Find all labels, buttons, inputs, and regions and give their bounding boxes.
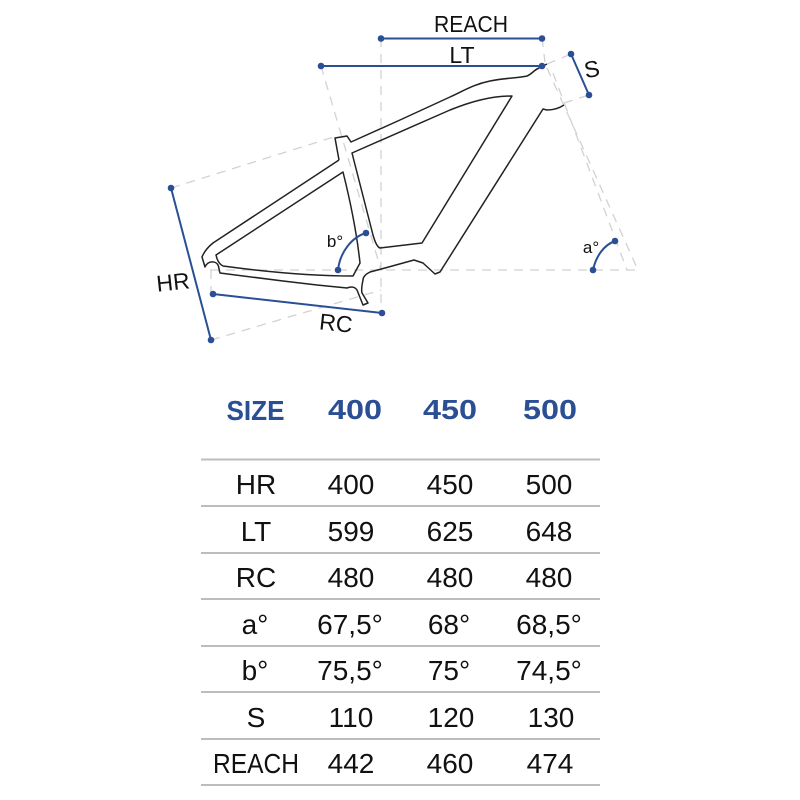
dimension S (568, 51, 602, 98)
frame top contour (335, 64, 547, 160)
row HR: 400 (328, 469, 374, 500)
row HR: 450 (427, 469, 473, 500)
frame lower contour (202, 105, 564, 305)
row b: 75,5° (317, 655, 383, 686)
row HR (236, 469, 572, 500)
row RC: 480 (328, 562, 374, 593)
main triangle opening (352, 96, 512, 248)
row S: 130 (528, 702, 574, 733)
table header: 500 (523, 394, 577, 425)
row b: b° (242, 655, 268, 686)
table header: 450 (423, 394, 477, 425)
dimension RC: RC (318, 308, 354, 338)
dimension REACH (378, 11, 545, 42)
row LT: 599 (328, 516, 374, 547)
row RC: RC (236, 562, 276, 593)
row a (242, 609, 582, 640)
row b: 74,5° (516, 655, 582, 686)
dimension LT (318, 42, 545, 69)
row a: 67,5° (317, 609, 383, 640)
row S: 120 (428, 702, 474, 733)
angle b: b° (327, 232, 343, 251)
row REACH: 442 (328, 748, 374, 779)
row RC: 480 (526, 562, 572, 593)
row REACH (213, 748, 573, 779)
row REACH: 460 (427, 748, 473, 779)
row RC: 480 (427, 562, 473, 593)
row RC (236, 562, 572, 593)
bike frame outline (202, 64, 564, 305)
row b (242, 655, 582, 686)
table header: SIZE (226, 395, 284, 426)
row b: 75° (428, 655, 470, 686)
table rules (201, 460, 600, 785)
row S: 110 (329, 702, 373, 733)
row REACH: REACH (213, 748, 299, 779)
angle b (327, 230, 369, 273)
dimension LT: LT (449, 42, 475, 68)
angle a (583, 238, 618, 273)
row a: 68,5° (516, 609, 582, 640)
row LT: 648 (526, 516, 572, 547)
dimension HR (155, 185, 214, 343)
row HR: 500 (526, 469, 572, 500)
row a: a° (242, 609, 268, 640)
row LT (241, 516, 572, 547)
row a: 68° (428, 609, 470, 640)
row REACH: 474 (527, 748, 573, 779)
angle a: a° (583, 238, 599, 257)
row LT: LT (241, 516, 271, 547)
rear triangle opening (216, 172, 360, 276)
dimension RC (210, 291, 385, 338)
row LT: 625 (427, 516, 473, 547)
row S (247, 702, 574, 733)
table header (226, 394, 577, 426)
row HR: HR (236, 469, 276, 500)
row S: S (247, 702, 265, 733)
dimension HR: HR (155, 267, 191, 297)
dimension REACH: REACH (434, 11, 508, 37)
dimension S: S (582, 55, 602, 83)
table header: 400 (328, 394, 382, 425)
